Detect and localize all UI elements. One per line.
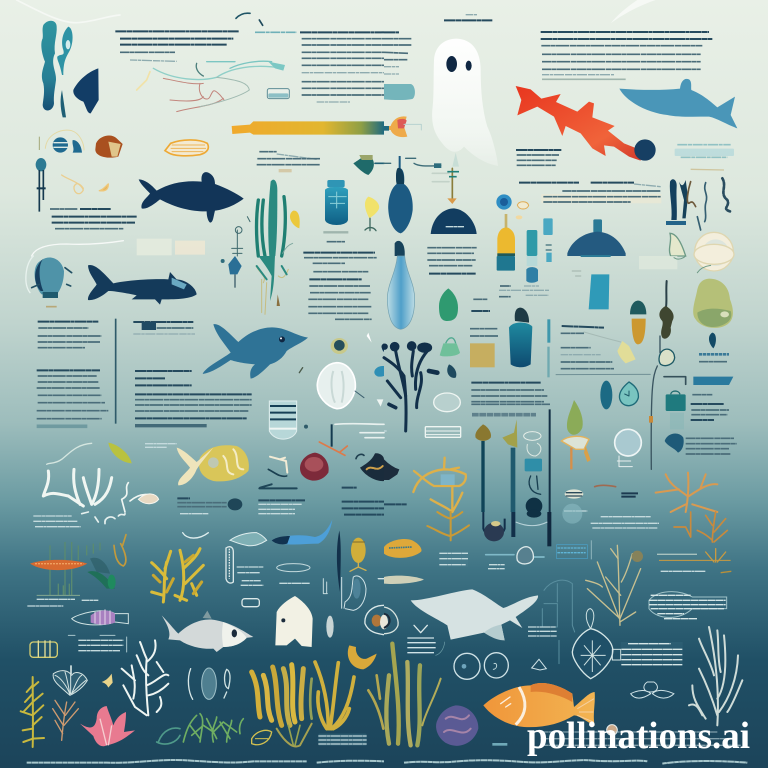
- icon: two circles: [454, 653, 508, 679]
- text block: bottom wave line: [404, 760, 747, 764]
- background swoosh: [17, 0, 120, 23]
- text block: wide note: [519, 183, 661, 203]
- icon: bud on stem: [475, 424, 491, 512]
- text block: mid note: [516, 150, 561, 165]
- icon: teal cup: [589, 274, 609, 309]
- icon: small green shell: [252, 730, 272, 745]
- icon: dark shell: [360, 453, 384, 481]
- icon: yellow tag: [617, 341, 636, 363]
- icon: seaweed leaf: [57, 27, 73, 117]
- icon: white and dark clip: [268, 457, 287, 476]
- icon: small pill: [267, 89, 289, 99]
- icon: eye shell: [299, 333, 372, 373]
- icon: purple fish: [72, 609, 128, 625]
- icon: small gold moth: [102, 674, 113, 688]
- icon: orange coral: [674, 512, 727, 542]
- icon: orange fern: [53, 700, 78, 740]
- icon: round net shell: [572, 609, 621, 679]
- text block: white tag: [145, 444, 177, 447]
- icon: brown shell: [95, 136, 123, 158]
- icon: black tree: [383, 343, 437, 431]
- icon: teal bar and bag: [664, 377, 733, 429]
- icon: yellow striped pill: [165, 140, 208, 156]
- icon: purple rock: [436, 705, 478, 746]
- text block: jar caption: [303, 232, 375, 253]
- icon: tall green plant: [257, 180, 293, 256]
- quadrant: top left specimens: [17, 0, 384, 256]
- text block: small heading: [444, 15, 492, 20]
- icon: dark fish: [139, 172, 244, 223]
- icon: small shells: [565, 485, 638, 499]
- icon: yellow pen bar: [232, 121, 384, 135]
- icon: yellow lamp: [350, 538, 366, 571]
- icon: sketch panel: [524, 432, 542, 514]
- icon: sea grass edge: [386, 644, 441, 745]
- icon: small arcs: [236, 13, 263, 25]
- icon: two round shells: [45, 130, 84, 153]
- icon: glass tube: [269, 401, 308, 439]
- text block: pale caption: [675, 145, 734, 170]
- quadrant: middle left specimens: [26, 256, 384, 512]
- icon: tall plant base: [256, 256, 288, 314]
- icon: blue lid: [567, 219, 626, 256]
- text block: sketched table: [68, 635, 127, 652]
- text block: chart caption: [27, 599, 98, 606]
- icon: white oval: [434, 393, 460, 412]
- text block: centre right: [556, 326, 651, 375]
- text block: bottom wave line: [27, 760, 384, 763]
- icon: diver head in ring: [26, 256, 72, 307]
- text block: left block one: [38, 322, 102, 348]
- icon: green blob: [693, 279, 733, 328]
- icon: blue dots: [374, 343, 384, 377]
- icon: maroon shell: [300, 453, 329, 481]
- icon: sketch tools: [226, 547, 327, 607]
- icon: dark fin: [73, 68, 99, 113]
- text block: under watermark lines: [541, 732, 741, 745]
- text block: right lines: [304, 258, 377, 319]
- divider: teal vertical bar: [547, 319, 550, 377]
- icon: teal jar: [509, 308, 532, 367]
- icon: yellow bottle: [497, 214, 515, 256]
- text block: beside shell: [439, 551, 468, 567]
- icon: dark ring edge: [384, 607, 398, 634]
- icon: lens with line: [486, 547, 544, 569]
- illustration: lined fish sketch: [649, 592, 727, 619]
- text block: lower notes: [177, 484, 384, 510]
- illustration: outline apparatus: [542, 580, 575, 664]
- text block: bottle note: [427, 260, 476, 274]
- divider: black vertical rule: [547, 409, 553, 512]
- icon: yellow fish: [177, 445, 249, 485]
- text block: top lines: [33, 514, 384, 527]
- text block: centre block one: [133, 322, 195, 334]
- icon: white bars: [425, 427, 461, 437]
- icon: curved hook: [183, 533, 208, 538]
- icon: dark kelp stem: [649, 281, 675, 469]
- icon: dark fish edge: [384, 459, 399, 480]
- divider: dark vertical mark: [337, 530, 341, 592]
- icon: yellow flower: [365, 197, 379, 231]
- icon: dark whale: [88, 265, 197, 305]
- background swoosh right: [611, 0, 656, 23]
- text block: apparatus lines: [528, 627, 557, 636]
- icon: yellow fern: [21, 677, 44, 747]
- icon: red pin: [319, 424, 364, 459]
- icon: pale worm: [47, 443, 92, 464]
- icon: blue sphere: [496, 194, 529, 219]
- icon: stems and bowl: [483, 510, 551, 546]
- quadrant: lower right specimens: [384, 504, 747, 764]
- icon: orange branch coral: [656, 473, 717, 512]
- text block: blob caption: [699, 354, 729, 362]
- icon: dark bottle: [388, 156, 413, 233]
- text block: left block two: [37, 370, 108, 426]
- icon: pin tool: [36, 137, 46, 212]
- chart: bar sketch with orange fish: [30, 542, 116, 595]
- icon: dark drop: [709, 333, 716, 348]
- icon: beige box: [470, 343, 495, 367]
- icon: small seed: [138, 494, 159, 504]
- icon: teal tubes base: [497, 256, 552, 283]
- icon: pale pebble: [326, 616, 334, 638]
- illustration: sketched seaweed: [137, 61, 285, 112]
- text block: blue tag: [557, 540, 591, 559]
- icon: dark tools: [666, 178, 731, 230]
- quadrant: top right specimens: [384, 0, 737, 271]
- icon: orange circle: [384, 116, 421, 137]
- icon: yellow coral: [152, 549, 203, 602]
- text block: fingerprint note: [686, 438, 737, 454]
- icon: small blue blade: [221, 256, 242, 288]
- watermark: pollinations.ai: [527, 715, 750, 757]
- icon: red shark: [516, 86, 656, 161]
- icon: white stingray: [411, 589, 538, 640]
- icon: rings and leaf: [669, 232, 733, 271]
- icon: bell jar: [342, 576, 384, 610]
- icon: green creature: [353, 155, 384, 175]
- icon: gold branch fish: [413, 458, 466, 512]
- text block: column two end: [384, 32, 411, 74]
- icon: white jellyfish blob: [317, 363, 383, 409]
- icon: white coral: [43, 469, 157, 512]
- icon: second bud on stem: [502, 419, 517, 512]
- text block: lower small: [492, 725, 617, 744]
- text block: chevron note: [407, 625, 445, 655]
- icon: dolphin: [203, 324, 308, 379]
- icon: blue shark: [619, 79, 737, 128]
- text block: right column: [541, 32, 712, 79]
- icon: white coral tree: [122, 640, 168, 715]
- icon: grey fish: [162, 611, 253, 652]
- icon: blue jar: [325, 180, 348, 225]
- icon: leaf plant: [561, 400, 591, 469]
- icon: yellow jar sketch: [30, 640, 57, 657]
- icon: dark fingerprint: [665, 434, 684, 453]
- text block: column two: [255, 32, 384, 102]
- icon: tiny triangle: [532, 659, 546, 670]
- icon: white squiggles: [82, 512, 125, 524]
- icon: yellow leaf: [108, 443, 132, 463]
- icon: yellow sketch: [62, 175, 108, 194]
- icon: sea plant stalk: [586, 545, 643, 625]
- icon: yellow sea grass two: [315, 662, 354, 729]
- icon: green hedge: [157, 714, 243, 744]
- icon: pale pill: [384, 576, 424, 584]
- icon: gold fish shell: [384, 539, 422, 558]
- icon: pale shell fan: [53, 666, 87, 695]
- text block: short note: [257, 152, 320, 171]
- text block: sea grass caption: [318, 734, 367, 746]
- icon: white sea plant: [689, 627, 742, 725]
- text block: centre stack: [471, 383, 550, 415]
- text block: heading one: [115, 31, 239, 61]
- icon: green handbag: [440, 338, 460, 356]
- icon: pale sketch note: [572, 244, 734, 276]
- illustration: white ship sketch: [335, 424, 384, 438]
- icon: gold curl: [348, 645, 377, 669]
- icon: two tone capsule: [630, 301, 646, 344]
- text block: net note: [621, 642, 683, 665]
- icon: teal pill: [384, 84, 415, 100]
- icon: small tool: [384, 158, 441, 168]
- icon: grass edge: [368, 675, 383, 729]
- panel: pale boxes: [32, 239, 205, 256]
- text block: top right notes: [562, 504, 659, 528]
- icon: feather fish: [230, 519, 332, 546]
- icon: orange fish: [483, 683, 595, 727]
- text block: small labels: [470, 286, 549, 336]
- icon: green gem: [439, 288, 458, 321]
- icon: yellow-green sea grass: [252, 665, 312, 746]
- icon: tiny plant: [432, 153, 459, 204]
- icon: pale blue bottle: [387, 256, 415, 329]
- icon: pale sea flower: [631, 682, 674, 698]
- text block: amber note: [657, 549, 731, 573]
- icon: gold hook: [114, 535, 126, 566]
- icon: white ghost: [432, 39, 498, 166]
- quadrant: lower left specimens: [21, 512, 388, 763]
- icon: kelp blobs: [41, 21, 57, 110]
- text block: edge lines: [384, 431, 587, 511]
- icon: teal tubes: [527, 218, 553, 256]
- icon: navy dome: [431, 208, 477, 234]
- icon: pink anemone: [80, 706, 135, 746]
- text block: label and lines: [50, 209, 137, 229]
- quadrant: middle right specimens: [383, 244, 737, 514]
- icon: yellow leaf: [290, 211, 300, 228]
- icon: yellow branch: [427, 512, 469, 540]
- icon: blue oval and clock: [600, 381, 638, 409]
- text block: lower note: [395, 241, 477, 256]
- icon: tiny plant: [232, 217, 250, 256]
- icon: shell dish: [365, 605, 388, 635]
- icon: half shell: [447, 364, 456, 378]
- icon: white ovals: [188, 668, 230, 699]
- text block: centre block two: [135, 371, 252, 426]
- divider: vertical rule: [113, 319, 118, 424]
- text block: bag note: [691, 395, 729, 420]
- icon: white cream tag: [275, 596, 313, 647]
- icon: white bulb: [615, 429, 641, 467]
